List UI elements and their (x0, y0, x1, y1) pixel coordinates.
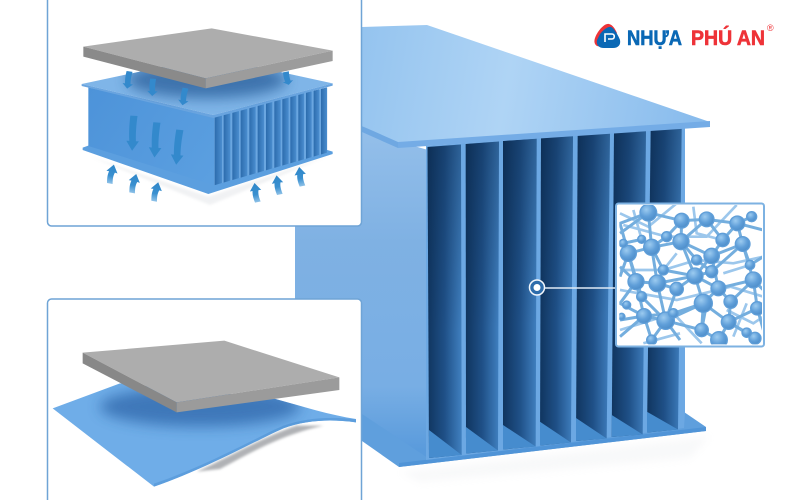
ground shadow (90, 157, 327, 205)
panel: bending sheet (48, 299, 362, 500)
logo: Nhựa Phú An (594, 23, 774, 50)
back bonds (620, 203, 763, 343)
channels (428, 128, 682, 458)
atoms (618, 204, 764, 348)
icon: logo mark (594, 24, 620, 48)
panel: compression load test (48, 0, 362, 226)
brand name accent: PHÚ AN (691, 26, 765, 50)
registered mark: ® (767, 23, 774, 33)
bottom flange (362, 412, 706, 467)
grey plate (83, 341, 339, 412)
grey plate (83, 28, 333, 88)
sheet front edge (154, 418, 356, 487)
bending illustration (53, 341, 356, 487)
bottom flange (83, 146, 333, 194)
arrows: up (104, 164, 308, 203)
front frame (426, 128, 685, 460)
arrows: down (122, 71, 294, 165)
brand name: NHỰA (627, 27, 682, 50)
shadow on sheet (127, 62, 287, 98)
callout pointer (530, 280, 618, 295)
blue sheet (53, 383, 356, 487)
main structure: sandwich panel section (295, 25, 710, 482)
top plate (362, 25, 710, 148)
top sheet (82, 57, 333, 115)
fins (214, 88, 328, 185)
sheet shadow (197, 426, 323, 472)
shadow on sheet (100, 387, 300, 427)
load illustration (82, 28, 333, 205)
floor shadow (400, 436, 710, 482)
bonds (620, 213, 763, 340)
side face (88, 87, 214, 185)
molecular structure inset (616, 203, 764, 348)
left side wall (295, 131, 428, 462)
